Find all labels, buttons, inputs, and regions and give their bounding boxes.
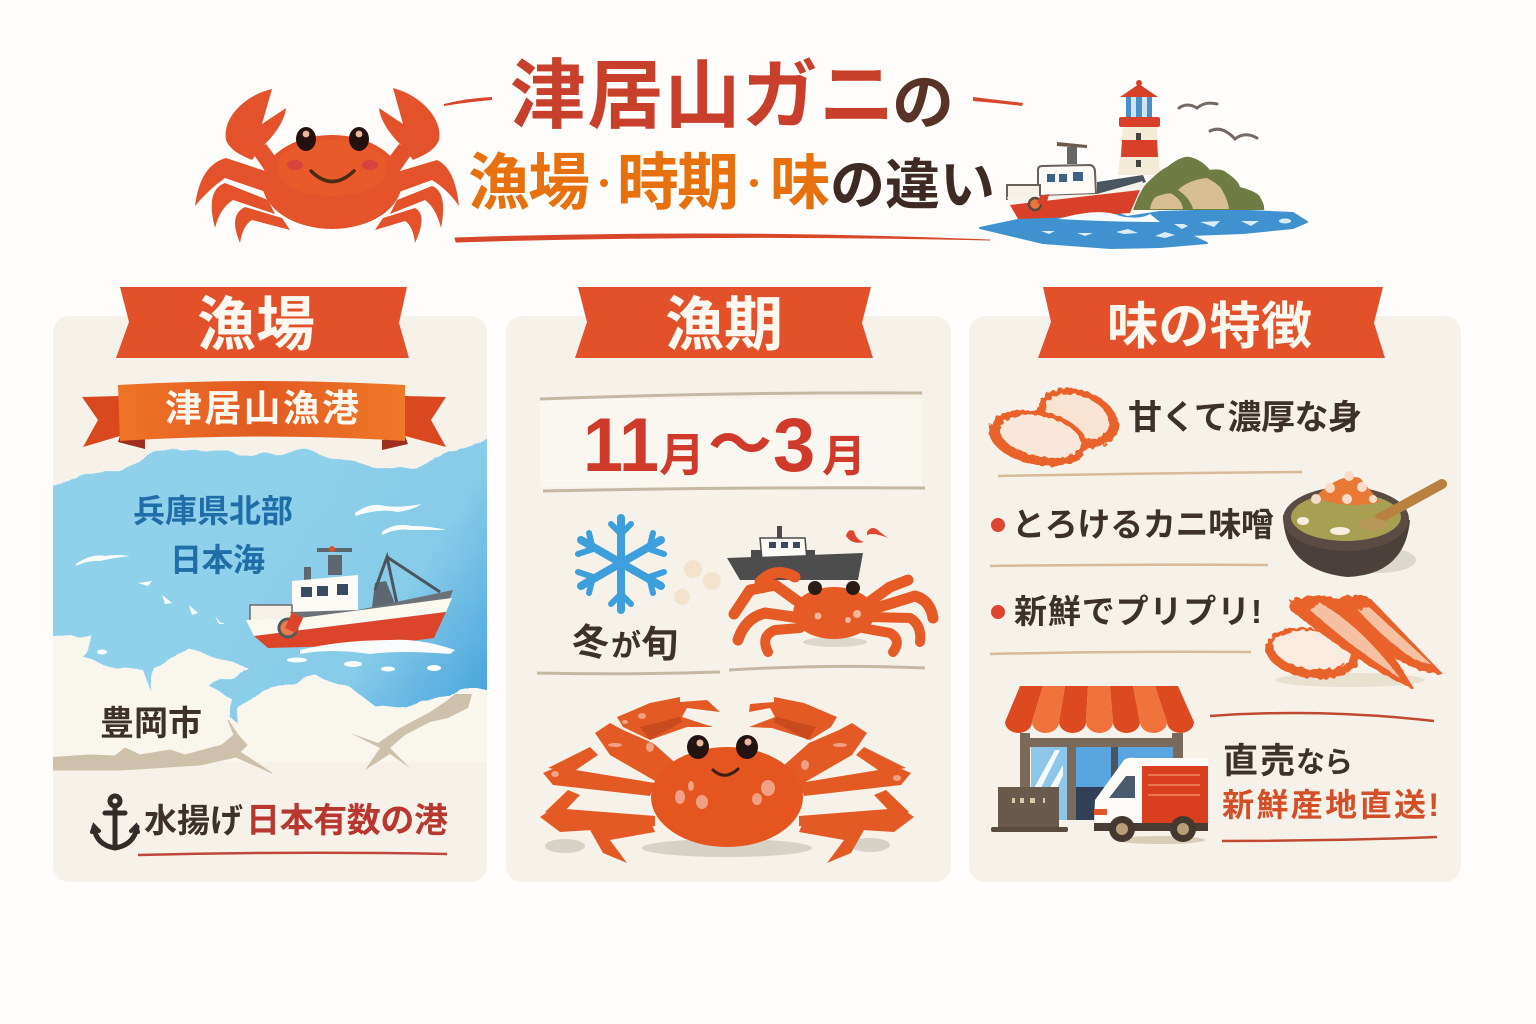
port name ribbon — [82, 381, 446, 450]
title line 1: の — [892, 69, 954, 138]
shadows — [545, 838, 890, 857]
small crab — [734, 573, 933, 652]
season dates: 3 — [773, 403, 815, 488]
text: 新鮮産地直送！: 新鮮産地直送! — [1222, 787, 1439, 823]
delivery truck — [1094, 758, 1208, 844]
text: 冬が旬: 旬 — [641, 624, 678, 665]
text: 水揚げ: 水揚げ — [144, 802, 243, 839]
text: 直売なら — [1223, 742, 1353, 781]
fishing boat — [1007, 142, 1160, 222]
text: 直売なら: 直売 — [1223, 742, 1295, 781]
map: sea and coast — [40, 436, 500, 773]
text: 日本有数の港: 日本有数の港 — [246, 802, 448, 840]
heading banner: 漁期 — [575, 287, 873, 358]
illustration: crab meat — [983, 377, 1127, 475]
illustration: shop and truck — [991, 686, 1208, 844]
text: 直売なら: なら — [1296, 747, 1353, 779]
illustration: crab miso bowl — [1283, 471, 1442, 577]
label: 兵庫県北部: 兵庫県北部 — [133, 493, 293, 529]
label: 豊岡市: 豊岡市 — [100, 705, 202, 743]
crate — [991, 787, 1068, 832]
icon: anchor — [92, 796, 138, 848]
title line 1: 津居山ガニ — [510, 54, 895, 139]
illustration: crab legs — [1262, 595, 1444, 689]
text: 冬が旬: 冬 — [572, 622, 609, 663]
panel: fishing ground — [40, 316, 500, 882]
fishing boat — [246, 546, 455, 654]
striped awning — [1005, 686, 1194, 733]
text: 冬が旬: が — [611, 629, 641, 663]
season dates: 〜 — [708, 411, 772, 480]
title line 2 — [468, 149, 995, 218]
title line 2: 漁場 — [468, 149, 590, 218]
water — [980, 210, 1307, 248]
title — [444, 54, 1023, 242]
text: 新鮮でプリプリ！: 新鮮でプリプリ! — [1014, 593, 1262, 630]
island — [1133, 157, 1264, 210]
season dates: 月 — [822, 432, 866, 481]
label: 日本海: 日本海 — [170, 542, 265, 578]
heading banner: 漁場 — [116, 287, 409, 358]
large crab — [540, 697, 914, 863]
snow dots — [674, 560, 721, 605]
panel: flavor — [969, 316, 1461, 882]
small boat — [727, 526, 888, 580]
icon: snowflake — [578, 518, 664, 610]
bullet — [991, 605, 1005, 619]
text: 冬が旬 — [572, 622, 678, 665]
title line 2: の違い — [830, 154, 995, 216]
heading banner: 味の特徴 — [1038, 287, 1385, 358]
title line 2: 時期 — [617, 149, 739, 218]
heading banner: 漁期: 漁期 — [665, 292, 783, 358]
heading banner: 味の特徴: 味の特徴 — [1107, 298, 1312, 355]
text: 甘くて濃厚な身: 甘くて濃厚な身 — [1128, 399, 1362, 437]
heading banner: 漁場: 漁場 — [197, 292, 315, 358]
port name ribbon: 津居山漁港 — [165, 388, 359, 429]
season dates — [583, 403, 866, 488]
season dates: 11 — [583, 403, 659, 488]
text: とろけるカニ味噌: とろけるカニ味噌 — [1012, 506, 1274, 543]
panel: fishing season — [506, 316, 951, 882]
band behind dates — [540, 399, 922, 487]
season dates: 月 — [659, 429, 705, 481]
title line 2: 味 — [770, 150, 830, 217]
birds — [1179, 103, 1257, 139]
illustration: boat, lighthouse and island — [980, 80, 1307, 248]
bullet — [991, 518, 1005, 532]
icon: smiling crab — [195, 88, 459, 243]
lighthouse — [1118, 80, 1160, 175]
